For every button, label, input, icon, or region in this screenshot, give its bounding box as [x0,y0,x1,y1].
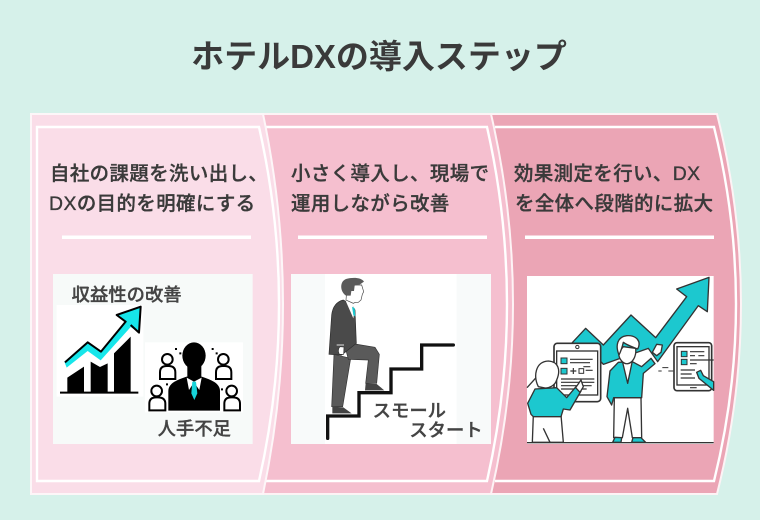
figure: left woman [528,361,583,442]
icon: right tablet [658,343,714,391]
heading: step 3: を全体へ段階的に拡大 [515,193,713,215]
label: small start [373,400,483,441]
panel: step 3 [480,114,741,494]
chart: rising bars with arrow [60,307,141,394]
heading: step 3: 効果測定を行い、DX [514,163,701,185]
figure: presenter right hand [697,370,714,390]
icon: rising teal arrow [572,277,709,364]
figure: businessman climbing [329,278,384,413]
panel: step 2 [240,114,513,494]
heading: step 2: 運用しながら改善 [291,193,450,215]
label: profitability: 収益性の改善 [72,284,182,305]
label: small start: スモール [373,400,446,421]
icon: manager with team [149,342,240,411]
heading: step 3 [514,163,713,215]
heading: step 2 [291,163,489,215]
heading: step 1: 自社の課題を洗い出し、 [50,163,268,185]
heading: step 1: DXの目的を明確にする [49,193,256,215]
title: ホテルDXの導入ステップ [191,38,567,75]
label: labor shortage: 人手不足 [158,418,231,439]
icon: stairs [328,345,453,438]
illustration: team and growth arrow [527,276,714,444]
label: small start: スタート [409,420,483,441]
panel: step 1 [31,114,283,494]
heading: step 1 [49,163,268,215]
illustration: profitability and labor shortage [53,274,253,444]
heading: step 2: 小さく導入し、現場で [291,163,489,185]
illustration: small start stairs [291,274,491,444]
figure: center man [607,336,662,442]
icon: left tablet [554,343,601,402]
